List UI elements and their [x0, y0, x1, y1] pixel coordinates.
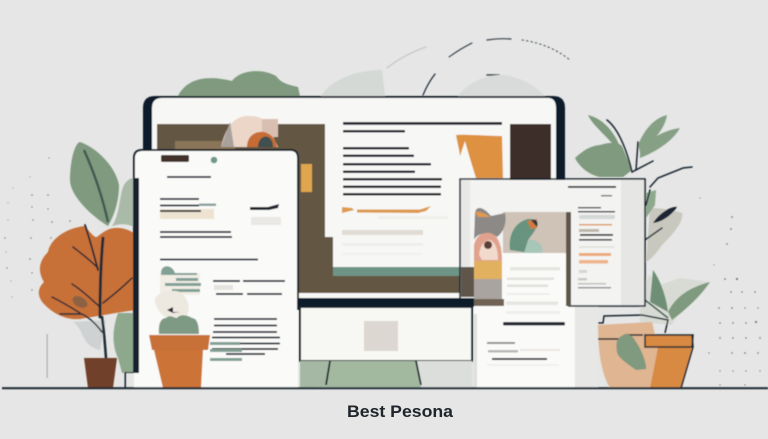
photo panel: [503, 212, 570, 253]
right lower document card: [474, 215, 598, 388]
white sheet overlay: [474, 225, 566, 314]
phone tick mark: [250, 204, 279, 210]
monitor screen: brown panel: [157, 124, 460, 293]
monitor screen: grey placeholder lines: [342, 216, 448, 255]
brown block: [474, 299, 504, 306]
right upper document card: [460, 179, 645, 314]
dotted texture: left: [4, 157, 71, 298]
dotted texture: right: [700, 198, 761, 386]
right terracotta pots: [593, 315, 693, 388]
monitor screen: orange brush stroke: [342, 206, 431, 213]
monitor screen: tan block: [175, 141, 235, 161]
monitor screen: dark block: [510, 124, 551, 180]
phone grey block: [251, 217, 281, 225]
decorative arcs above the monitor: [387, 39, 570, 95]
left plant pot: [84, 358, 117, 388]
monitor base bar: [300, 298, 474, 307]
ground line: [2, 387, 768, 389]
brown divider strip: [566, 212, 571, 306]
phone text lines: [160, 176, 285, 355]
monitor screen: green stripe: [333, 267, 460, 276]
phone green list: [161, 266, 242, 361]
vertical tick mark: [46, 334, 48, 378]
phone flower: [155, 291, 189, 319]
phone cactus plant: [159, 315, 199, 334]
card lower-left brown strip: [461, 267, 474, 297]
grey block: [474, 279, 502, 299]
phone terracotta pot: [149, 335, 210, 388]
plant: left leaves and orange foliage: [39, 142, 138, 373]
chin square: [364, 321, 398, 351]
monitor stand: [300, 361, 472, 388]
monitor screen: portrait figure: [221, 116, 278, 147]
left phone document: [124, 150, 298, 388]
green figure: [510, 219, 543, 253]
monitor screen: orange banner: [456, 135, 503, 178]
phone tan highlight: [160, 209, 214, 219]
pink arch portrait: [474, 233, 502, 261]
phone left edge: [124, 178, 139, 388]
background shapes behind the monitor: [178, 70, 545, 96]
monitor screen: text lines: [343, 122, 502, 196]
phone camera dot: [211, 157, 217, 163]
monitor screen: orange tab: [301, 164, 312, 192]
card outline: [460, 179, 645, 306]
caption: Best Pesona: [347, 402, 454, 421]
phone flower stem: [167, 307, 180, 313]
yellow block: [474, 261, 502, 279]
phone grey lines: [214, 285, 233, 290]
lower card text lines: [487, 322, 565, 366]
card sidebar text lines: [568, 186, 616, 288]
grey figure with orange hair: [474, 208, 506, 240]
phone speaker: [161, 155, 189, 162]
monitor chin: [300, 307, 472, 361]
monitor: [143, 96, 565, 388]
right plant: [575, 115, 710, 325]
phone beige backdrop: [160, 273, 200, 295]
lower card lines over overlay: [506, 267, 560, 314]
